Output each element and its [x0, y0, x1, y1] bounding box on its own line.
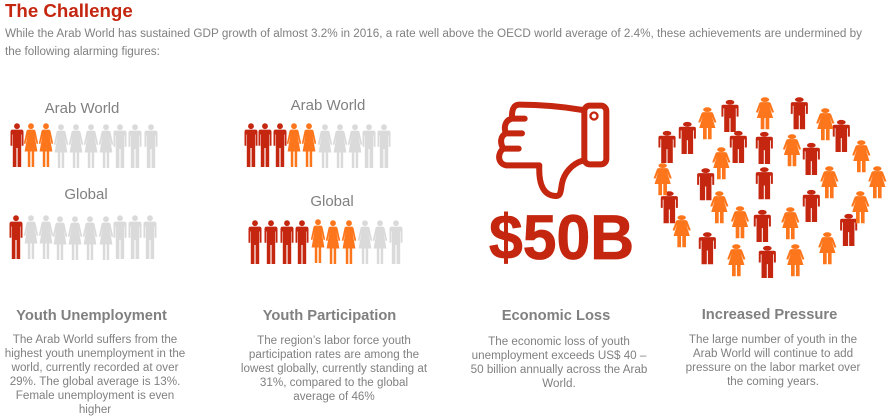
figure: $50B: $50B — [489, 203, 634, 273]
text: Youth Unemployment — [5, 333, 185, 416]
text: Increased Pressure: The large number of youth in the — [689, 333, 857, 346]
intro text: While the Arab World has sustained GDP growth of almost 3.2% in 2016, a rate well above the OECD world average of 2.4%, these achievements are undermined by — [5, 27, 862, 40]
panel: economic loss — [471, 105, 647, 390]
intro text — [5, 27, 862, 58]
panel: youth unemployment — [5, 100, 185, 416]
text: Increased Pressure — [686, 333, 860, 388]
text: Youth Unemployment: The Arab World suffers from the — [13, 333, 177, 346]
pictogram: Global participation — [248, 219, 402, 264]
text: Economic Loss: 50 billion annually across the Arab — [471, 363, 647, 376]
icon: thumbs down — [499, 105, 606, 196]
label: Global: Global — [310, 193, 354, 210]
text: Increased Pressure: pressure on the labor market over — [686, 361, 860, 374]
text: Economic Loss — [471, 335, 647, 390]
text: Economic Loss: World. — [542, 377, 576, 390]
text: Youth Participation — [241, 334, 428, 403]
heading: Increased Pressure: Increased Pressure — [702, 307, 837, 323]
text: Youth Unemployment: 29%. The global average is 13%. — [10, 375, 180, 388]
text: Youth Participation: 31%, compared to the global — [260, 376, 408, 389]
text: Economic Loss: The economic loss of youth — [488, 335, 630, 348]
text: Youth Unemployment: world, currently recorded at over — [11, 361, 179, 374]
pictogram: Global unemployment — [10, 215, 156, 260]
pictogram: Arab World participation — [244, 123, 390, 168]
text: Youth Participation: lowest globally, currently standing at — [241, 362, 428, 375]
panel: youth participation — [241, 97, 428, 403]
text: Increased Pressure: the coming years. — [727, 375, 819, 388]
text: Increased Pressure: Arab World will continue to add — [693, 347, 853, 360]
text: Youth Participation: average of 46% — [293, 390, 375, 403]
text: Youth Participation: The region’s labor force youth — [257, 334, 411, 347]
text: Youth Unemployment: highest youth unemployment in the — [5, 347, 185, 360]
label: Arab World: Arab World — [291, 97, 365, 114]
text: Economic Loss: unemployment exceeds US$ 40 – — [472, 349, 647, 362]
label: Arab World: Arab World — [45, 100, 119, 117]
label: Global: Global — [64, 186, 108, 203]
heading: Youth Participation: Youth Participation — [263, 308, 396, 324]
heading: Youth Unemployment: Youth Unemployment — [16, 308, 167, 324]
text: Youth Participation: participation rates are among the — [249, 348, 419, 361]
pictogram: crowd cluster — [654, 97, 886, 278]
intro text: the following alarming figures: — [5, 45, 160, 58]
text: Youth Unemployment: Female unemployment is even — [16, 389, 174, 402]
panel: increased pressure — [654, 97, 886, 388]
text: Youth Unemployment: higher — [79, 403, 111, 416]
pictogram: Arab World unemployment — [10, 123, 158, 168]
heading: Economic Loss: Economic Loss — [502, 308, 610, 324]
title: The Challenge — [5, 0, 133, 21]
